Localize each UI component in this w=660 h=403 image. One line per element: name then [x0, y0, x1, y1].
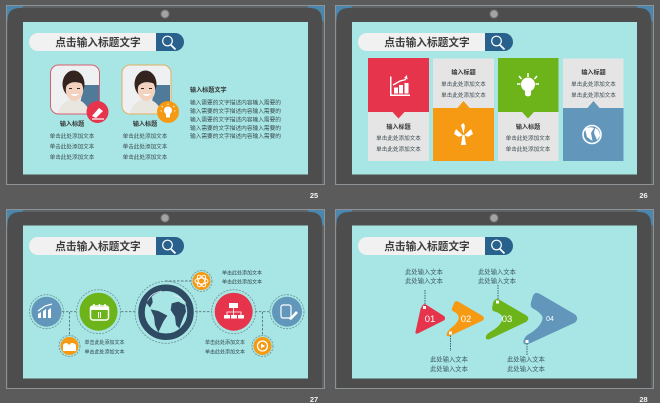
text block: description: 输入标题文字: [190, 86, 227, 94]
title search bar: [358, 33, 513, 51]
arrow 02: 02: [461, 314, 471, 325]
column 4: blue globe card: 输入标题: [581, 68, 606, 76]
node: small factory circle: [59, 336, 80, 356]
arrow 02: [447, 301, 484, 336]
tablet frame: [6, 6, 324, 184]
arrow 04: [523, 293, 577, 344]
text block: lower right: 单击此处添加文本: [205, 348, 245, 356]
text block: card 1: 单击此处添加文本: [50, 132, 95, 140]
column 4: blue globe card: 单击此处添加文本: [571, 80, 616, 88]
node: document circle: [270, 295, 304, 329]
icon: pen badge: [86, 101, 108, 123]
column 4: blue globe card: 单击此处添加文本: [571, 91, 616, 99]
node: chart circle: [30, 295, 64, 329]
text block: lower left: 单击此处添加文本: [84, 339, 125, 346]
connectors: [62, 281, 271, 336]
title search bar: 点击输入标题文字: [384, 36, 470, 49]
column 2: orange wind card: 输入标题: [451, 68, 476, 76]
icon: growth chart: [390, 75, 410, 96]
node: small play circle: [252, 336, 273, 356]
text block: card 1: 单击此处添加文本: [50, 153, 95, 161]
callout text 01: [405, 267, 444, 285]
text block: description: 输入需要的文字描述内容输入需要的: [190, 116, 281, 124]
text block: lower right: 单击此处添加文本: [205, 339, 245, 346]
text block: upper right: 单击此处添加文本: [222, 270, 262, 276]
panel: slide 26: [336, 6, 654, 200]
icon: globe: [583, 126, 601, 144]
arrow 04: 04: [546, 316, 554, 323]
title search bar: [358, 237, 513, 255]
callout text 04: [507, 354, 546, 373]
column 4: blue globe card: [563, 58, 624, 161]
tablet frame: [336, 6, 654, 184]
text block: description: 输入需要的文字描述内容输入需要的: [190, 124, 281, 132]
title search bar: 点击输入标题文字: [55, 240, 141, 253]
node: small atom circle: [191, 270, 212, 292]
callout leaders: [423, 285, 528, 356]
node: org chart circle: [212, 290, 256, 334]
panel: slide 25: [6, 6, 324, 200]
portrait card 2: [122, 65, 179, 123]
title search bar: 点击输入标题文字: [55, 36, 141, 49]
callout text 03: 此处输入文本: [478, 276, 517, 285]
icon: wind turbine: [454, 123, 473, 145]
text block: lower right: [205, 339, 245, 356]
text block: lower left: [84, 339, 125, 356]
text block: description: 输入需要的文字描述内容输入需要的: [190, 98, 281, 106]
column 1: red chart card: 单击此处添加文本: [376, 134, 421, 142]
text block: description: 输入需要的文字描述内容输入需要的: [190, 107, 281, 115]
arrow 01: 01: [425, 314, 435, 325]
title search bar: 点击输入标题文字: [384, 240, 470, 253]
column 2: orange wind card: [433, 58, 494, 161]
title search bar: [29, 33, 184, 51]
column 2: orange wind card: 单击此处添加文本: [441, 80, 486, 88]
text block: card 2: 单击此处添加文本: [123, 153, 168, 161]
text block: lower left: 单击此处添加文本: [84, 348, 125, 356]
callout text 03: 此处输入文本: [478, 267, 517, 276]
text block: card 2: 输入标题: [133, 120, 157, 128]
callout text 01: 此处输入文本: [405, 276, 444, 285]
column 1: red chart card: 输入标题: [386, 123, 411, 131]
arrow 03: [486, 299, 528, 339]
callout text 04: 此处输入文本: [507, 354, 546, 364]
text block: upper right: 单击此处添加文本: [222, 279, 262, 286]
arrow 03: 03: [502, 314, 512, 325]
column 3: green bulb card: [498, 58, 558, 161]
text block: card 1: 输入标题: [60, 120, 84, 128]
text block: description: 输入需要的文字描述内容输入需要的: [190, 132, 281, 140]
callout text 02: [430, 354, 469, 373]
column 1: red chart card: 单击此处添加文本: [376, 145, 421, 153]
callout text 04: 此处输入文本: [507, 364, 546, 373]
title search bar: [29, 237, 184, 255]
callout text 01: 此处输入文本: [405, 267, 444, 276]
text block: upper right: [222, 270, 262, 286]
tablet frame: [6, 210, 324, 388]
callout text 02: 此处输入文本: [430, 364, 469, 373]
column 3: green bulb card: 输入标题: [516, 123, 540, 131]
text block: card 2: 单击此处添加文本: [123, 142, 168, 150]
column 1: red chart card: [368, 58, 429, 161]
text block: card 2: [123, 120, 168, 161]
tablet frame: [336, 210, 654, 388]
panel: slide 27: [6, 210, 324, 403]
text block: card 2: 单击此处添加文本: [123, 132, 168, 140]
text block: card 1: 单击此处添加文本: [50, 142, 95, 150]
text block: card 1: [50, 120, 95, 161]
column 3: green bulb card: 单击此处添加文本: [506, 134, 551, 142]
icon: light bulb: [517, 73, 539, 96]
column 2: orange wind card: 单击此处添加文本: [441, 91, 486, 99]
callout text 02: 此处输入文本: [430, 354, 469, 364]
page number: 25: [310, 191, 318, 200]
column 3: green bulb card: 单击此处添加文本: [506, 145, 551, 153]
text block: description: [190, 86, 281, 140]
page number: 26: [639, 191, 648, 200]
node: globe: [135, 281, 197, 343]
node: calendar circle: [76, 290, 120, 334]
arrow 01: [415, 304, 445, 334]
panel: slide 28: [336, 210, 654, 403]
portrait card 1: [50, 65, 108, 123]
callout text 03: [478, 267, 517, 285]
icon: bulb badge: [157, 101, 179, 123]
